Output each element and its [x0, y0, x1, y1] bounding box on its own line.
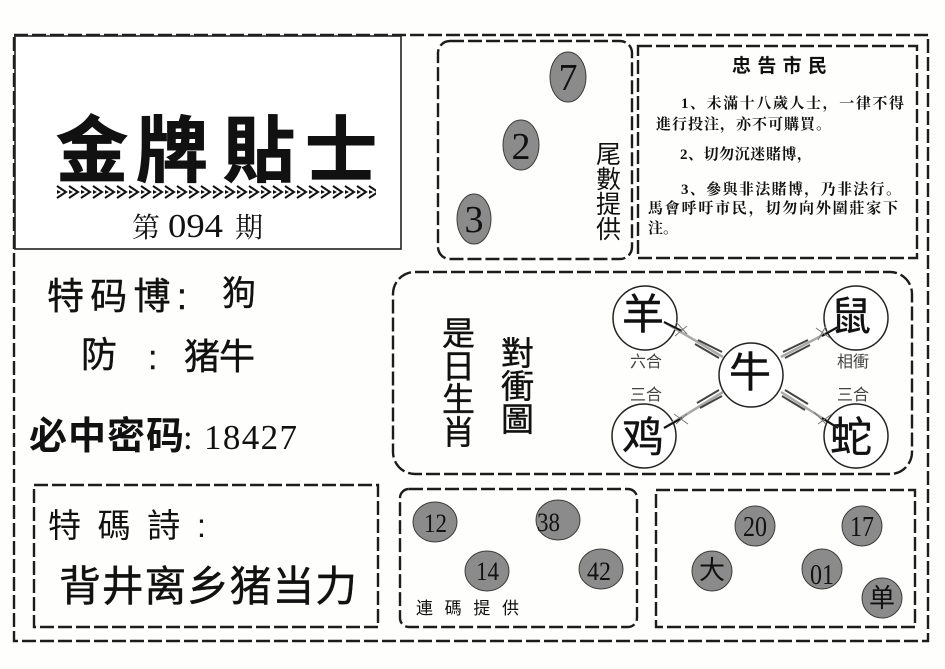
ball 2: 2 [512, 126, 530, 168]
vertical label [596, 141, 621, 244]
ball 7: 7 [558, 57, 578, 99]
advice text: 1、未滿十八歲人士，一律不得 [681, 94, 904, 113]
relation labels: 六合 [630, 353, 662, 371]
advice text: 進行投注，亦不可購買。 [656, 115, 831, 134]
text: special code zodiac [47, 275, 256, 317]
issue number: 期 [235, 212, 263, 244]
node: rooster: 鸡 [622, 414, 664, 461]
panel: tail numbers [438, 41, 632, 259]
ball 20: 20 [743, 512, 767, 543]
ball 2 [503, 120, 539, 170]
advice text: 注。 [648, 219, 678, 237]
advice text [648, 94, 904, 237]
relation labels: 三合 [630, 386, 662, 404]
vertical title: clash chart [501, 335, 534, 438]
heading: gold tips: 牌 [136, 112, 208, 192]
label: 連碼提供 [416, 599, 519, 618]
text: defend zodiac: 防 [81, 334, 117, 375]
node: rat: 鼠 [831, 295, 871, 339]
ball 01 [802, 549, 842, 591]
poem line: 背井离乡猪当力 [59, 563, 357, 610]
issue number [132, 208, 263, 245]
arrows [664, 322, 838, 428]
vertical title: clash chart: 衝 [501, 368, 534, 405]
vertical title: clash chart: 圖 [501, 401, 534, 438]
ball odd: 单 [869, 583, 895, 613]
text: secret code: 必中密码 [29, 416, 184, 458]
ball 38: 38 [537, 508, 560, 537]
panel: consecutive codes [400, 489, 637, 627]
panel: title [15, 36, 401, 249]
heading: gold tips [56, 112, 377, 192]
text: special code zodiac: 狗 [222, 275, 256, 313]
advice text: 3、參與非法賭博，乃非法行。 [681, 180, 901, 199]
text: special code zodiac: 特码博: [47, 276, 187, 317]
ball 14 [465, 551, 509, 591]
node: ox: 牛 [729, 349, 771, 396]
text: defend zodiac [81, 334, 255, 377]
text: secret code: 18427 [204, 418, 297, 457]
node: ox [719, 343, 783, 407]
vertical label: 數 [596, 166, 621, 194]
vertical label: 供 [596, 216, 621, 244]
ball 14: 14 [476, 557, 499, 586]
ball 17: 17 [850, 512, 874, 543]
text: secret code [29, 416, 297, 458]
vertical title: daily zodiac: 肖 [442, 414, 475, 451]
panel: zodiac chart [393, 272, 912, 474]
node: goat: 羊 [622, 291, 664, 338]
node: rat [824, 286, 888, 350]
node: rooster [612, 404, 676, 468]
relation labels: 相衝 [837, 353, 869, 371]
relation labels: 三合 [837, 386, 869, 404]
vertical title: daily zodiac: 生 [442, 381, 475, 418]
advice text: 馬會呼吁市民，切勿向外圍莊家下 [648, 199, 899, 218]
ball 38 [536, 500, 580, 540]
advice heading: 忠告市民 [732, 54, 827, 77]
ball 42 [579, 549, 623, 589]
vertical label: 提 [596, 191, 621, 219]
node: goat [613, 286, 677, 350]
ball 12: 12 [424, 509, 447, 538]
ball 01: 01 [810, 560, 834, 591]
relation labels [630, 353, 869, 404]
heading: gold tips: 貼 [223, 112, 295, 192]
vertical label: 尾 [596, 141, 621, 169]
heading: gold tips: 金 [56, 112, 128, 192]
advice text: 2、切勿沉迷賭博， [680, 145, 812, 164]
ball 3 [457, 194, 491, 244]
ball big: 大 [699, 555, 725, 585]
ball big [692, 551, 732, 591]
text: defend zodiac: 猪牛 [184, 336, 255, 377]
vertical title: daily zodiac: 是 [442, 315, 475, 352]
vertical title: clash chart: 對 [501, 335, 534, 372]
text: secret code: : [183, 418, 193, 457]
heading: gold tips: 士 [305, 112, 377, 192]
ball odd [862, 578, 902, 618]
ball 7 [550, 52, 586, 102]
issue number: 094 [168, 208, 223, 245]
ball 17 [842, 506, 882, 546]
ball 3: 3 [464, 199, 484, 241]
node: snake: 蛇 [830, 414, 872, 461]
ball 42: 42 [587, 557, 611, 586]
ball 12 [413, 502, 457, 542]
poem label: 特碼詩: [48, 507, 206, 544]
vertical title: daily zodiac [442, 315, 475, 451]
panel: numbers and size [656, 490, 915, 627]
vertical title: daily zodiac: 日 [442, 348, 475, 385]
decorative chevron row [56, 185, 376, 199]
text: defend zodiac: : [148, 339, 157, 377]
issue number: 第 [132, 212, 160, 244]
panel: poem [34, 485, 378, 627]
node: snake [824, 404, 888, 468]
ball 20 [735, 506, 775, 546]
panel: advice to citizens [638, 46, 917, 258]
